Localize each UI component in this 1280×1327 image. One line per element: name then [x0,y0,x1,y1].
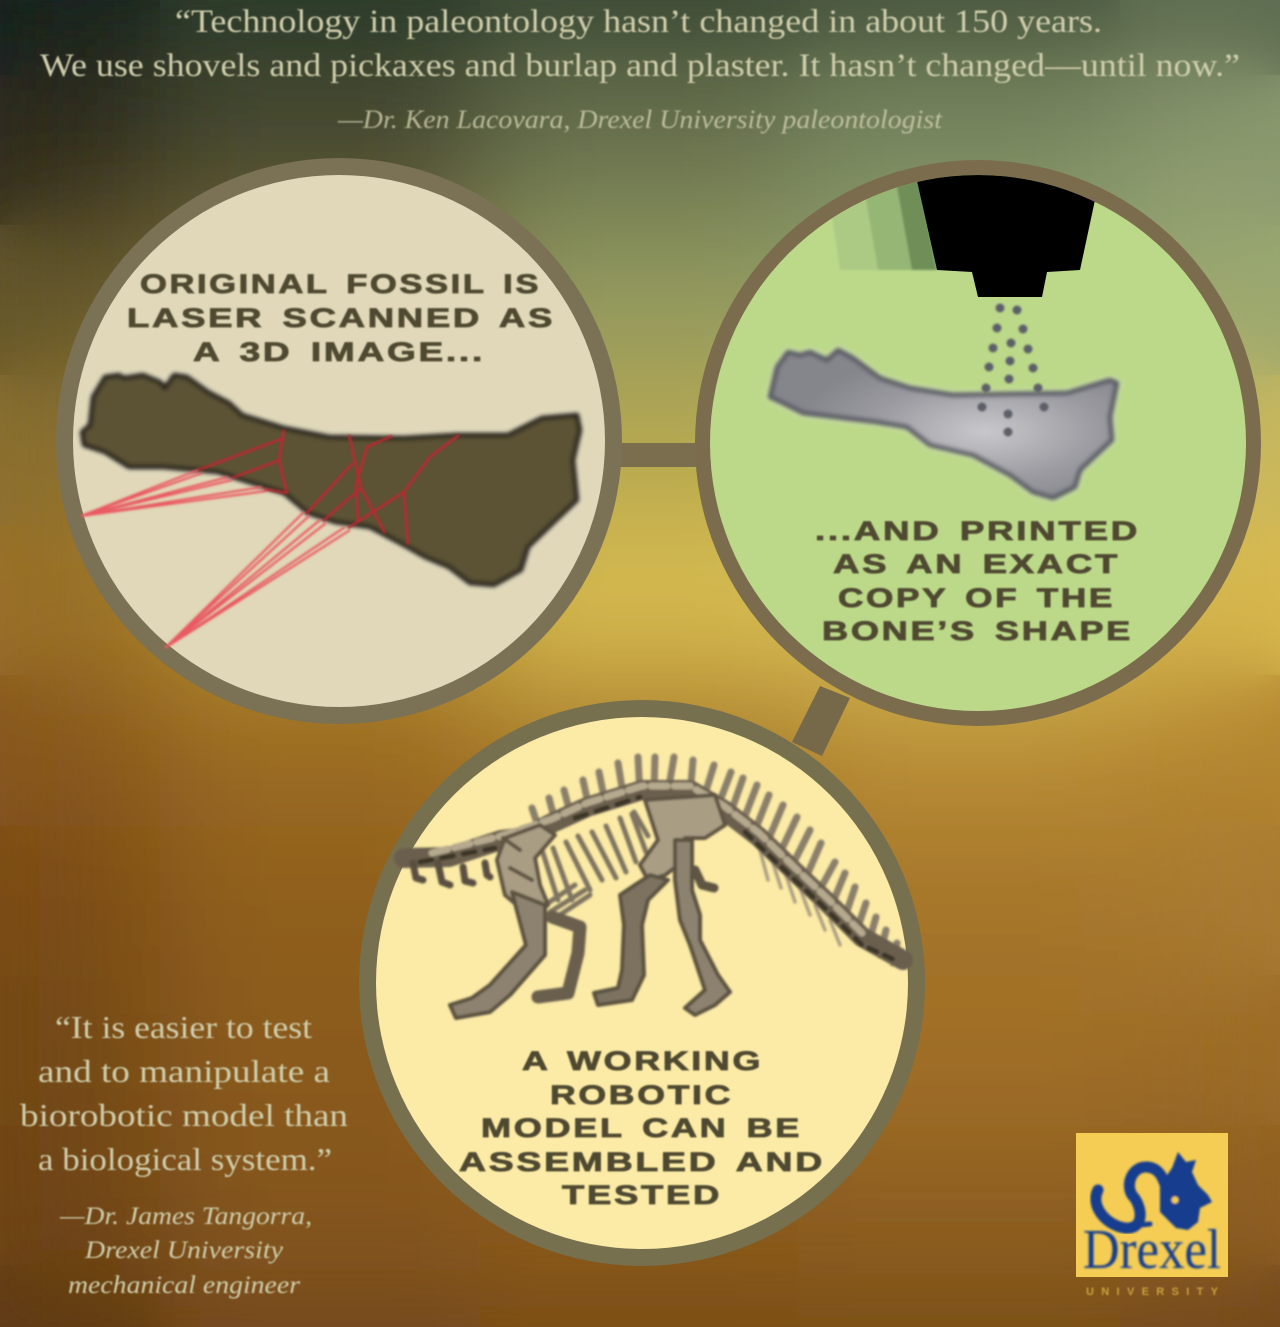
ischium bone [695,870,714,888]
heading: robot: A WORKING [522,1046,763,1076]
panel ring [359,700,925,1266]
backbone [404,790,903,960]
heading: scan [127,269,555,367]
sternal ribs [545,885,590,918]
printed bone [770,350,1117,498]
under tail chevrons [760,850,840,945]
leg: rear left [594,875,668,1005]
logo wordmark: Drexel [1083,1219,1221,1281]
panel: 3D printing [695,160,1261,726]
top quote: We use shovels and pickaxes and burlap and plaster. It hasn’t changed—until now.” [40,48,1240,84]
logo background [1076,1133,1228,1277]
bottom-left quote: mechanical engineer [68,1272,300,1299]
shoulder girdle [497,825,555,918]
heading: print: BONE’S SHAPE [822,616,1133,646]
panel fill [73,175,605,707]
bottom-left quote: biorobotic model than [20,1097,348,1133]
panel fill [710,175,1246,711]
leg: rear right [675,840,730,1015]
hip [640,795,725,880]
bottom-left quote: and to manipulate a [38,1053,330,1089]
bottom-left quote [20,1009,348,1299]
panel: robotic model [359,700,925,1266]
logo subtitle: UNIVERSITY [1086,1286,1219,1298]
bottom-left quote: a biological system.” [38,1141,332,1177]
heading: scan: A 3D IMAGE... [193,337,485,367]
heading: print: COPY OF THE [838,583,1115,613]
heading: robot [459,1046,825,1210]
bottom-left quote: “It is easier to test [55,1009,312,1045]
neck hooks [413,863,490,885]
bottom-left quote: —Dr. James Tangorra, [59,1203,312,1230]
laser beams [81,430,459,648]
heading: scan: ORIGINAL FOSSIL IS [140,269,541,299]
heading: robot: MODEL CAN BE [481,1113,802,1143]
heading: robot: ASSEMBLED AND [459,1147,825,1177]
material droplets [978,304,1048,436]
print head [915,172,1100,297]
heading: robot: ROBOTIC [550,1080,733,1110]
top quote [40,4,1240,134]
heading: print: AS AN EXACT [833,549,1120,579]
heading: scan: LASER SCANNED AS [127,303,555,333]
connector: print to robot [792,686,850,756]
leg: front left [450,892,545,1018]
printer rails [826,176,937,270]
Drexel logo [1076,1133,1228,1298]
heading: robot: TESTED [562,1180,722,1210]
panel ring [695,160,1261,726]
connector: scan to print [612,443,702,467]
icon: dragon [1096,1152,1212,1230]
top quote: —Dr. Ken Lacovara, Drexel University paleontologist [337,105,943,134]
ribs [542,812,648,900]
fossil silhouette [82,375,580,585]
dorsal spines [532,757,897,963]
panel: laser scan [56,158,622,724]
top quote: “Technology in paleontology hasn’t changed in about 150 years. [175,4,1102,40]
panel fill [376,717,908,1249]
panel ring [56,158,622,724]
leg: front right [538,917,580,997]
bottom-left quote: Drexel University [84,1237,284,1264]
heading: print: ...AND PRINTED [815,516,1140,546]
heading: print [815,516,1140,646]
dinosaur skeleton [404,757,903,1018]
